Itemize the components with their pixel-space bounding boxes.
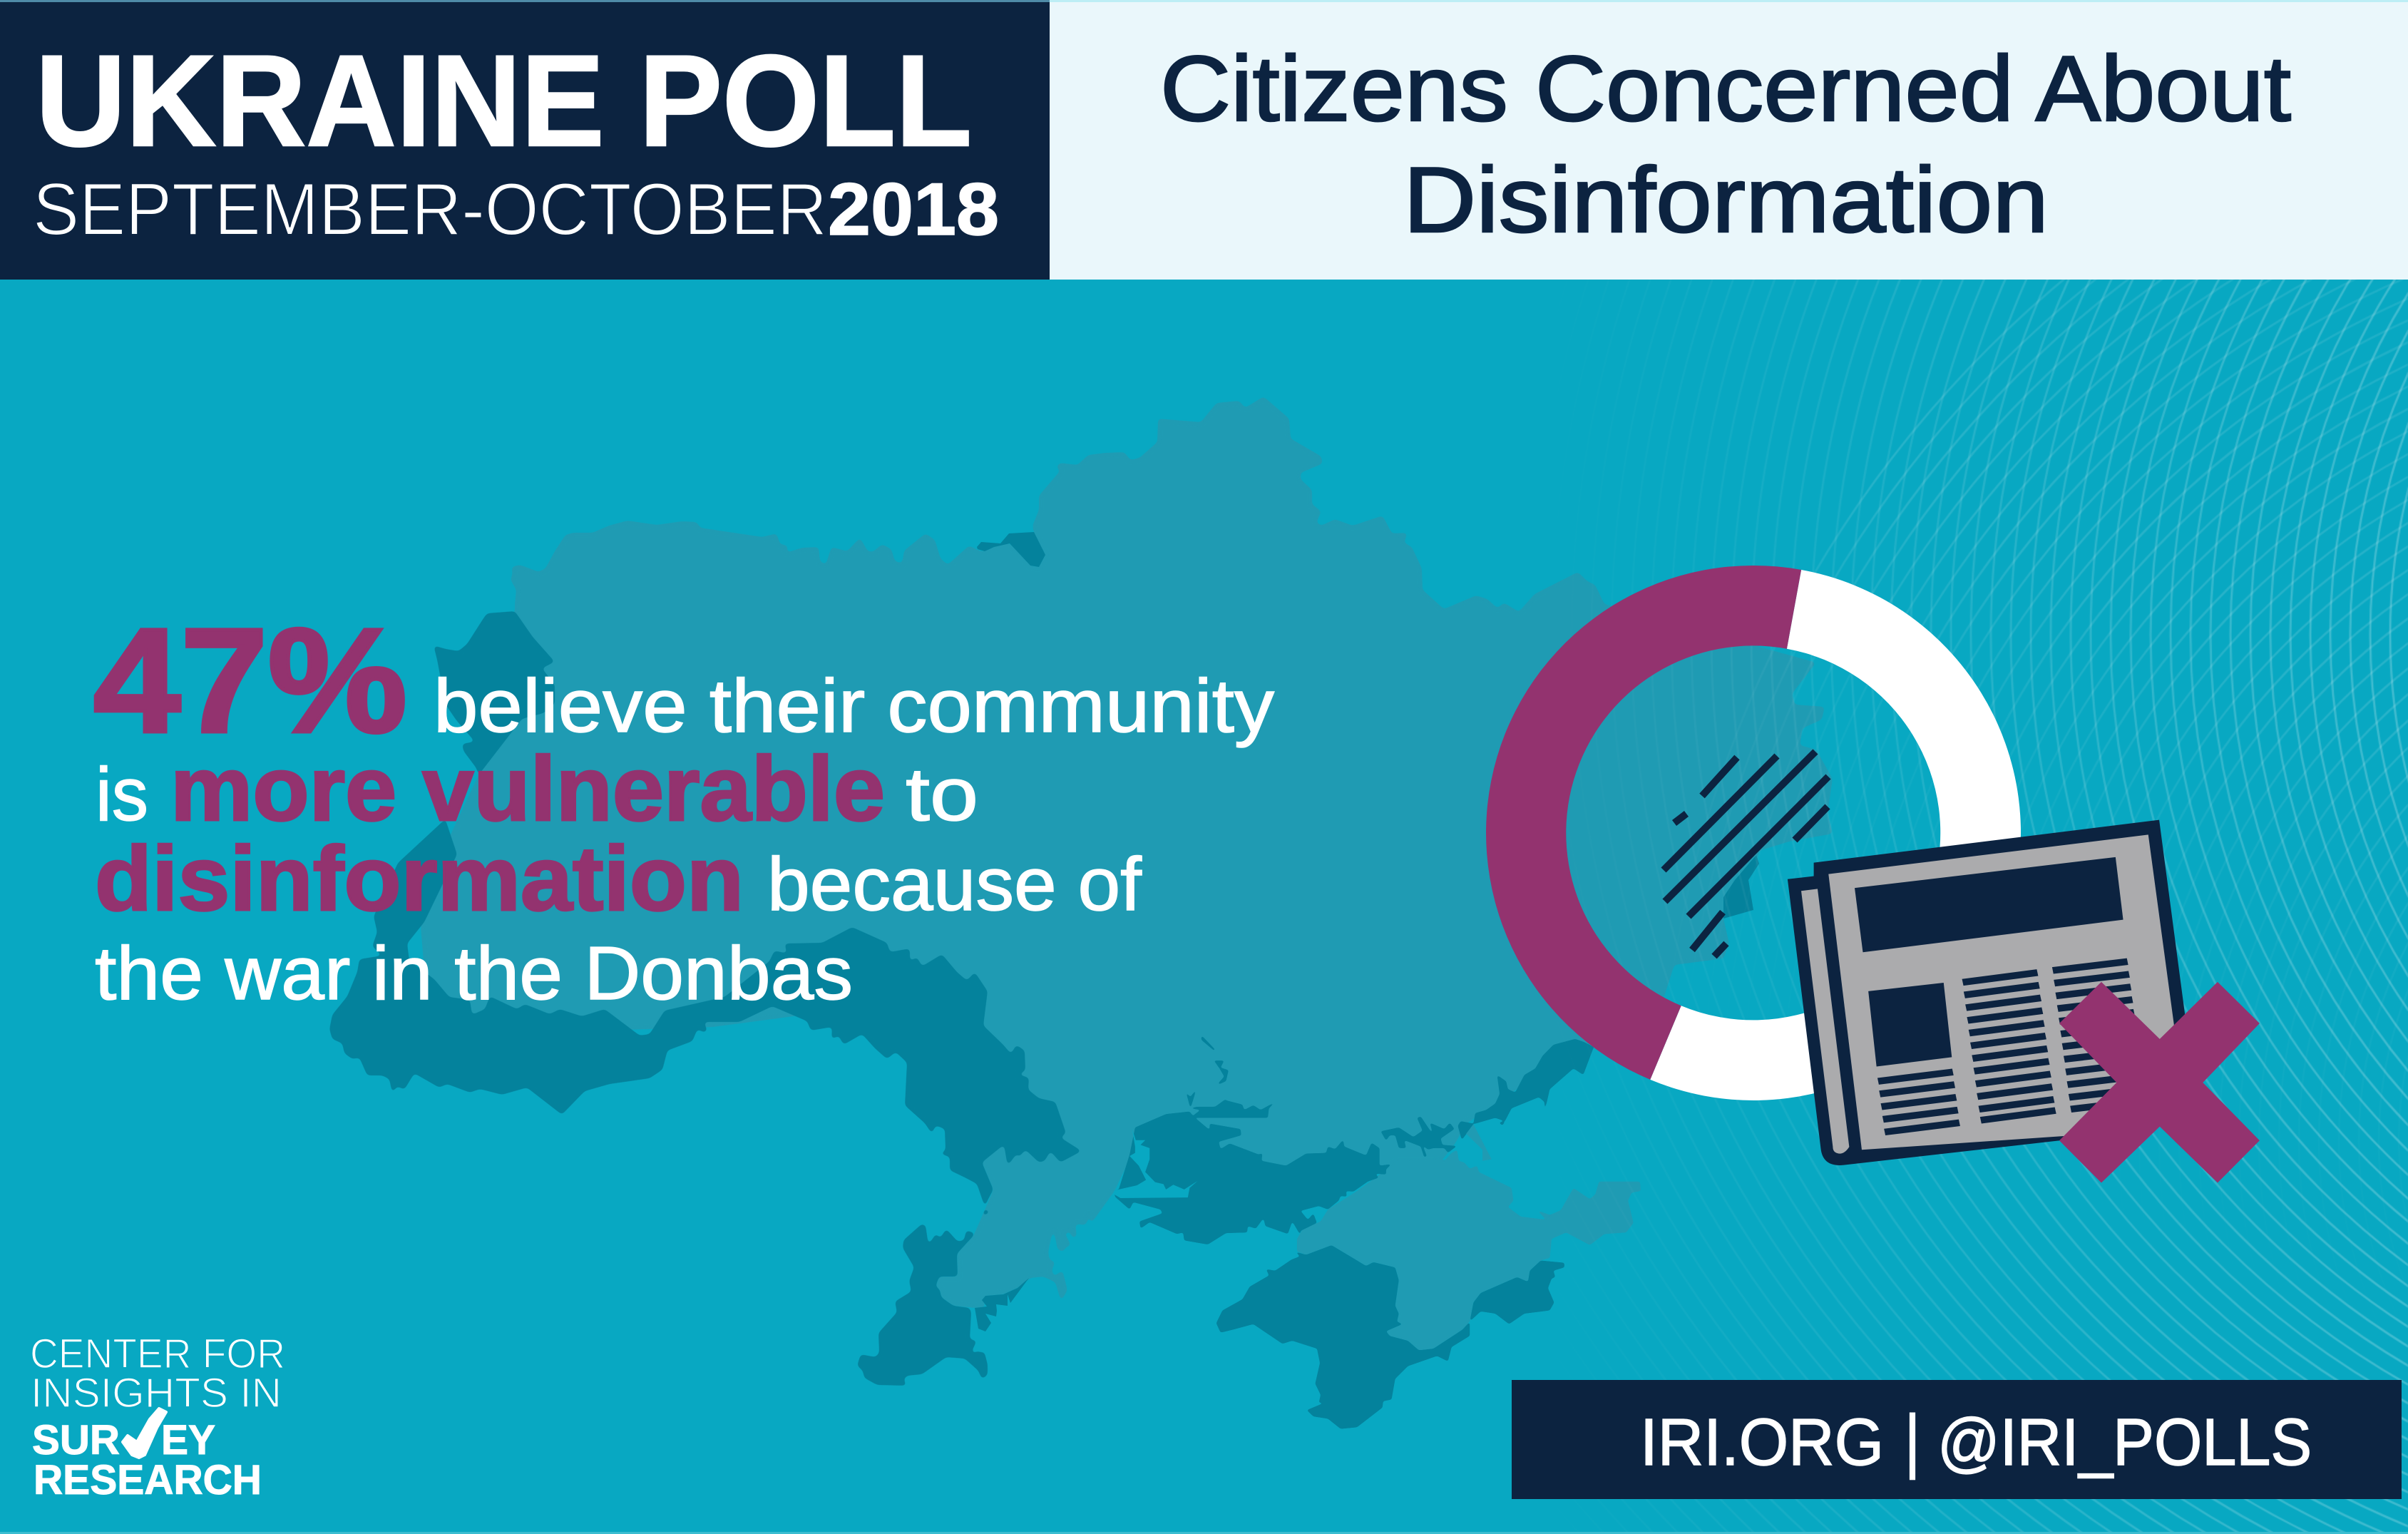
cross mark	[2059, 982, 2260, 1183]
Donbas hatching	[1664, 752, 1828, 956]
key finding text: believe their community	[434, 664, 1274, 748]
map: isthmus sliver	[1466, 1124, 1492, 1161]
logo: Center for Insights in Survey Research: RESEARCH	[34, 1457, 262, 1503]
contact bar: @IRI_POLLS	[1937, 1405, 2312, 1479]
logo: Center for Insights in Survey Research: SUR	[32, 1417, 120, 1463]
key finding text: is	[96, 752, 148, 837]
title: Ukraine Poll: UKRAINE POLL	[36, 28, 972, 173]
headline line 1: Citizens Concerned About	[1160, 36, 2291, 140]
map: mainland	[421, 397, 1833, 1308]
subtitle: year: 2018	[828, 168, 999, 251]
map: southern coastal shadows	[1114, 1035, 1595, 1429]
logo: Center for Insights in Survey Research	[30, 1331, 285, 1503]
header panel: poll title	[0, 0, 1050, 280]
map: estuary shadow	[975, 1278, 1029, 1331]
newspaper headline block	[1855, 857, 2123, 952]
logo: Center for Insights in Survey Research: CENTER FOR	[30, 1331, 285, 1377]
icon: check mark	[123, 1408, 166, 1458]
donut segment: 47%	[1486, 566, 1801, 1080]
contact bar: IRI.ORG	[1640, 1405, 1884, 1479]
key finding text: disinformation	[95, 828, 744, 930]
contact bar	[1512, 1380, 2402, 1499]
logo: Center for Insights in Survey Research: EY	[161, 1417, 215, 1463]
map: northern shadow	[977, 532, 1045, 567]
newspaper body	[1788, 820, 2188, 1165]
donut chart: 47%	[1486, 566, 2021, 1100]
header panel: headline	[1050, 0, 2408, 280]
contact bar: |	[1903, 1401, 1922, 1481]
map of Ukraine	[329, 397, 1833, 1429]
map: eastern hole shadow	[1723, 855, 1759, 919]
background pattern	[1670, 280, 2408, 1532]
map: Crimea	[1297, 1150, 1641, 1350]
key finding text	[93, 598, 1274, 1016]
headline line 2: Disinformation	[1403, 148, 2049, 252]
donut segment: remainder	[1650, 570, 2021, 1100]
map: south-western shadow	[857, 1224, 988, 1386]
key finding text: the war in the Donbas	[95, 931, 853, 1016]
newspaper picture block	[1868, 983, 1952, 1066]
subtitle: dates: SEPTEMBER-OCTOBER	[33, 168, 827, 251]
map: western and southern coastal shadow	[329, 611, 1082, 1217]
big number: 47%	[93, 598, 407, 764]
key finding text: to	[906, 752, 978, 837]
key finding text: more vulnerable	[170, 738, 885, 840]
map: estuary channel	[1114, 1129, 1198, 1198]
newspaper text lines	[1878, 961, 2146, 1132]
icon: newspaper with cross	[1788, 820, 2260, 1183]
logo: Center for Insights in Survey Research: INSIGHTS IN	[31, 1370, 282, 1416]
key finding text: because of	[767, 842, 1142, 926]
